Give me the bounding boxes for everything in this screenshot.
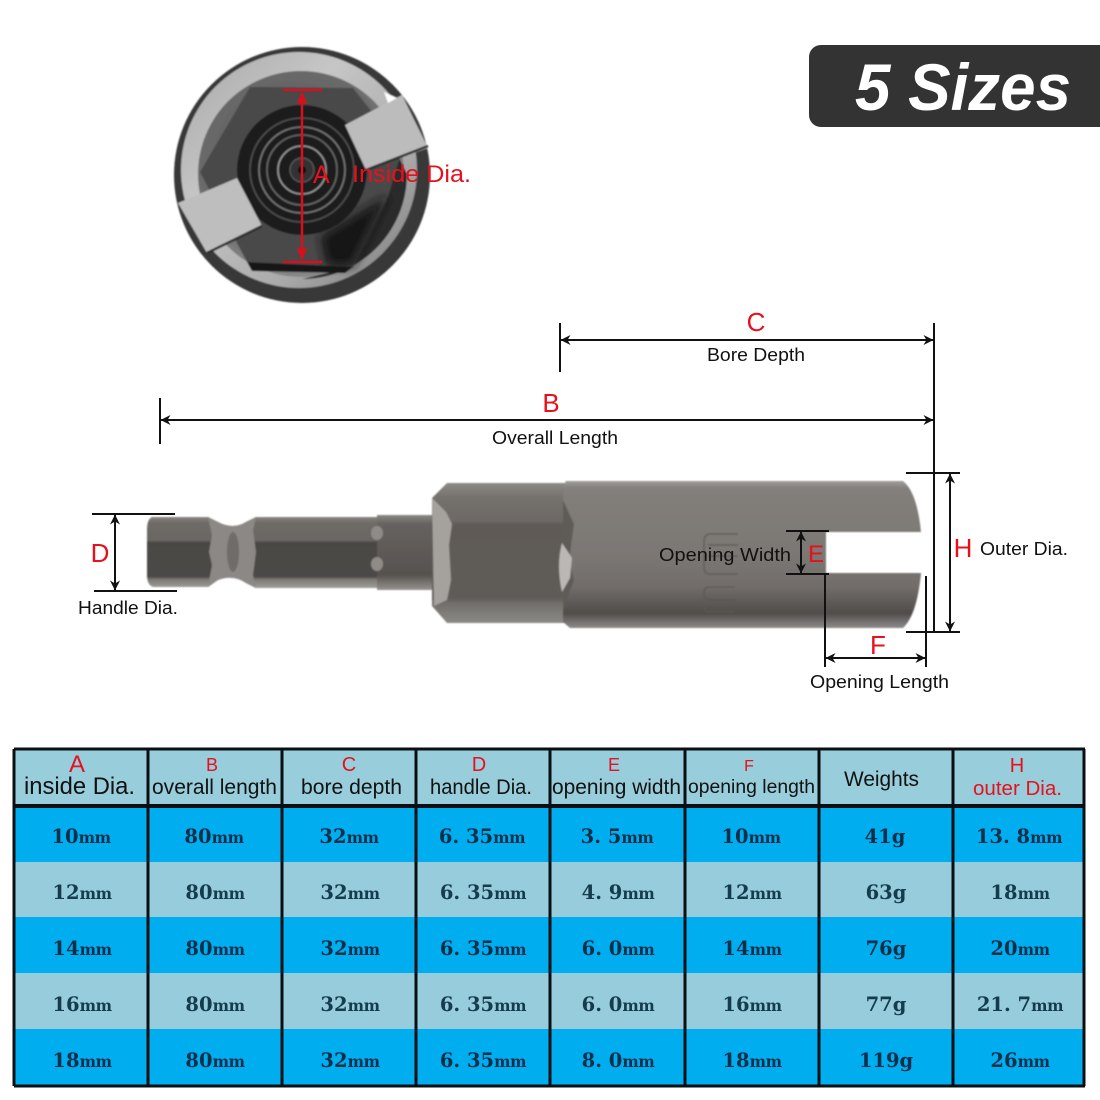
row: 10mm: 3. 5mm	[581, 825, 654, 848]
dimension H: outer dia	[906, 473, 1068, 632]
photo: nut driver side view	[147, 481, 921, 628]
table header labels: inside Dia.	[24, 773, 135, 800]
row: 12mm: 32mm	[320, 881, 381, 904]
table header labels: F	[744, 758, 754, 775]
row: 16mm	[52, 993, 1064, 1016]
table header labels: opening length	[688, 777, 815, 798]
table header labels: handle Dia.	[430, 776, 532, 799]
row: 16mm: 77g	[866, 993, 907, 1016]
dimension H: outer dia: H	[954, 533, 972, 563]
dimension B: overall length: Overall Length	[492, 428, 618, 448]
table grid lines	[14, 749, 1085, 1086]
dimension H: outer dia: Outer Dia.	[980, 539, 1068, 559]
dimension F: opening length: Opening Length	[810, 672, 949, 692]
table body row backgrounds	[14, 807, 1085, 1086]
table header labels	[24, 751, 1062, 800]
row: 16mm: 6. 0mm	[582, 993, 655, 1016]
table header labels: Weights	[844, 768, 919, 791]
row: 16mm: 16mm	[722, 993, 783, 1016]
size table	[14, 749, 1085, 1086]
dimension F: opening length: F	[870, 630, 886, 660]
row: 12mm	[52, 881, 1051, 904]
label: A Inside Dia.: Inside Dia.	[352, 161, 471, 188]
row: 10mm: 41g	[865, 825, 906, 848]
table header labels: H	[1010, 755, 1024, 777]
row: 18mm: 18mm	[722, 1049, 783, 1072]
row: 16mm: 16mm	[52, 993, 113, 1016]
table header labels: opening width	[552, 776, 681, 799]
collar	[377, 515, 432, 590]
table header labels: A	[69, 751, 85, 778]
dimension E: opening width	[659, 531, 829, 574]
row: 18mm: 8. 0mm	[582, 1049, 655, 1072]
row: 14mm: 6. 35mm	[440, 937, 527, 960]
badge: 5 Sizes: 5 Sizes	[855, 50, 1071, 124]
row: 12mm: 12mm	[52, 881, 113, 904]
dimension B: overall length	[160, 323, 934, 632]
dimension D: handle dia: Handle Dia.	[78, 598, 178, 618]
row: 18mm: 32mm	[320, 1049, 381, 1072]
row: 18mm: 119g	[859, 1049, 914, 1072]
dimension A: red arrow	[283, 90, 322, 262]
table header labels: C	[342, 754, 356, 776]
table header labels: B	[206, 755, 218, 775]
row: 14mm: 76g	[866, 937, 907, 960]
engraved mm mark	[704, 534, 738, 612]
dimension C: bore depth	[560, 307, 933, 372]
row: 14mm: 6. 0mm	[582, 937, 655, 960]
hex shank tip and neck	[147, 517, 392, 588]
row: 12mm: 4. 9mm	[582, 881, 655, 904]
row: 18mm: 18mm	[52, 1049, 113, 1072]
row: 18mm: 6. 35mm	[440, 1049, 527, 1072]
row: 12mm: 6. 35mm	[440, 881, 527, 904]
row: 14mm: 14mm	[52, 937, 113, 960]
dimension D: handle dia: D	[91, 538, 109, 568]
table header background	[14, 749, 1085, 807]
dimension E: opening width: E	[808, 541, 824, 568]
row: 16mm: 32mm	[320, 993, 381, 1016]
row: 14mm	[52, 937, 1051, 960]
table header labels: E	[608, 755, 620, 775]
row: 14mm: 20mm	[990, 937, 1051, 960]
row: 14mm: 32mm	[320, 937, 381, 960]
row: 14mm: 14mm	[722, 937, 783, 960]
row: 12mm: 18mm	[990, 881, 1051, 904]
row: 12mm: 80mm	[185, 881, 246, 904]
row: 16mm: 80mm	[185, 993, 246, 1016]
dimension F: opening length	[810, 574, 949, 692]
dimension C: bore depth: Bore Depth	[707, 345, 805, 365]
label: A Inside Dia.: A	[313, 161, 330, 189]
hex body	[432, 483, 566, 623]
dimension B: overall length: B	[542, 388, 560, 418]
row: 16mm: 21. 7mm	[977, 993, 1064, 1016]
row: 10mm: 6. 35mm	[439, 825, 526, 848]
row: 10mm: 10mm	[721, 825, 782, 848]
row: 10mm: 32mm	[319, 825, 380, 848]
table header labels: overall length	[152, 776, 277, 799]
dimension C: bore depth: C	[747, 307, 765, 337]
dimension D: handle dia	[78, 514, 178, 618]
table header labels: D	[472, 754, 486, 776]
photo: socket end view with inside diameter	[174, 47, 471, 303]
table header labels: outer Dia.	[973, 778, 1062, 800]
row: 10mm	[51, 825, 1063, 848]
dimension E: opening width: Opening Width	[659, 545, 791, 565]
row: 10mm: 80mm	[184, 825, 245, 848]
row: 14mm: 80mm	[185, 937, 246, 960]
row: 18mm	[52, 1049, 1051, 1072]
row: 10mm: 13. 8mm	[976, 825, 1063, 848]
row: 10mm: 10mm	[51, 825, 112, 848]
socket barrel	[563, 481, 921, 628]
row: 18mm: 80mm	[185, 1049, 246, 1072]
row: 18mm: 26mm	[990, 1049, 1051, 1072]
row: 12mm: 12mm	[722, 881, 783, 904]
row: 16mm: 6. 35mm	[440, 993, 527, 1016]
table header labels: bore depth	[301, 776, 402, 799]
badge: 5 Sizes	[809, 45, 1100, 127]
row: 12mm: 63g	[866, 881, 907, 904]
label: A Inside Dia.	[313, 161, 471, 189]
